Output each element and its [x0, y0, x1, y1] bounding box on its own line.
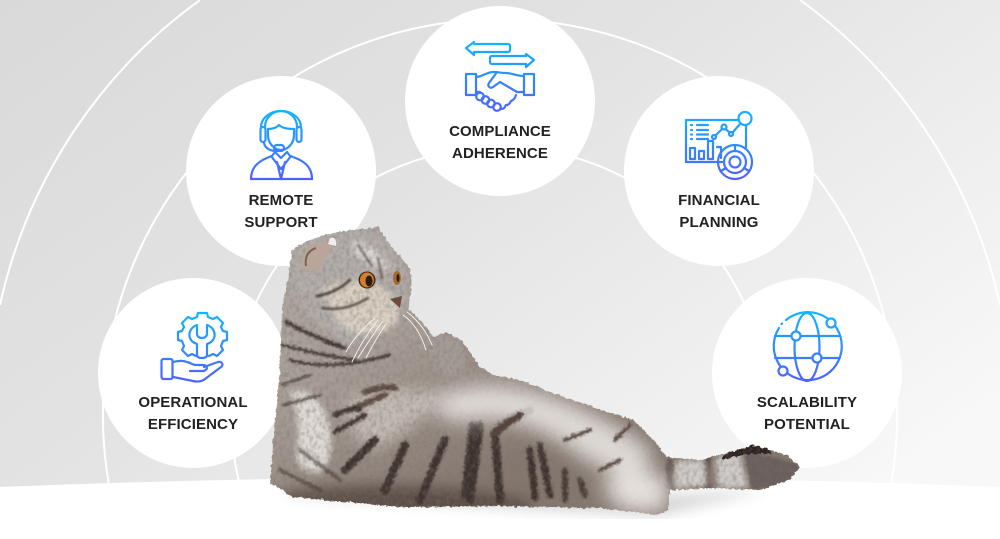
tail dark upper [722, 446, 772, 460]
panel: compliance adherence [405, 6, 595, 196]
nose [390, 296, 402, 308]
label: REMOTE [249, 192, 313, 209]
label: SUPPORT [244, 214, 318, 231]
forehead highlight [352, 240, 390, 270]
panel: remote support [186, 76, 376, 266]
cat photo illustration [265, 222, 805, 520]
tail pale band [675, 452, 748, 488]
label: EFFICIENCY [148, 416, 238, 433]
far eye [393, 271, 401, 285]
label [757, 394, 857, 433]
head markings [317, 245, 382, 309]
back markings [495, 415, 630, 470]
label: POTENTIAL [764, 416, 850, 433]
ear [302, 238, 336, 271]
panel: operational efficiency [98, 278, 288, 468]
cat body silhouette [270, 227, 800, 515]
raised paw [440, 353, 464, 374]
label [244, 192, 318, 231]
label: COMPLIANCE [449, 123, 551, 140]
icon: gear and hand [162, 313, 227, 382]
label: ADHERENCE [452, 145, 548, 162]
icon: handshake and arrows [466, 42, 534, 111]
label: FINANCIAL [678, 192, 760, 209]
label: PLANNING [679, 214, 759, 231]
tail tip dark [745, 452, 800, 490]
fur grain [265, 222, 805, 520]
lower body tone [280, 389, 530, 515]
icon: globe network [774, 312, 842, 381]
white ground [0, 477, 1000, 539]
cat shadow [280, 490, 770, 516]
head [292, 230, 408, 345]
arm [290, 391, 331, 472]
panel: financial planning [624, 76, 814, 266]
eye [358, 272, 376, 288]
belly highlight [430, 386, 668, 512]
label [138, 394, 248, 433]
face details [302, 238, 432, 362]
label: SCALABILITY [757, 394, 857, 411]
label: OPERATIONAL [138, 394, 248, 411]
panel: scalability potential [712, 278, 902, 468]
icon: dashboard [686, 112, 752, 179]
whiskers [346, 312, 432, 362]
muzzle and cheek [320, 280, 398, 335]
label [449, 123, 551, 162]
icon: headset agent [251, 111, 312, 179]
label [678, 192, 760, 231]
torso and tail stripes [280, 322, 708, 500]
